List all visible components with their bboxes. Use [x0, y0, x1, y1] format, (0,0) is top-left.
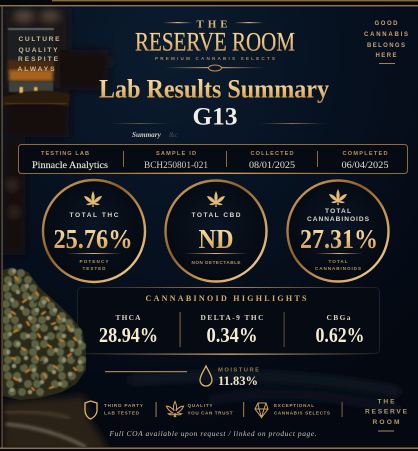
logo: PREMIUM CANNABIS SELECTS — [155, 56, 275, 61]
stat: total thc: POTENCY — [80, 259, 108, 264]
thca: 28.94% — [99, 323, 158, 347]
tagline left: ALWAYS — [18, 66, 55, 73]
cannabis bud — [3, 268, 86, 400]
completed: COMPLETED — [342, 151, 388, 157]
stat: total cannabinoids — [288, 180, 388, 282]
tagline right: BELONGS — [367, 43, 405, 49]
stat: total cannabinoids: TOTAL — [328, 259, 348, 264]
icon: leaf — [166, 401, 184, 417]
footnote: Full COA available upon request / linked on product page. — [108, 429, 317, 438]
moisture: MOISTURE — [218, 368, 259, 374]
cbga — [316, 313, 364, 347]
stat: total cannabinoids: 27.31% — [300, 224, 378, 254]
thca: THCA — [116, 313, 141, 322]
product name: G13 — [192, 104, 238, 130]
stat: total thc — [43, 180, 145, 282]
icon: diamond — [255, 403, 268, 418]
sample id: BCH250801-021 — [144, 160, 208, 170]
footer logo: RESERVE — [365, 408, 408, 416]
footer logo — [365, 398, 408, 432]
collected: 08/01/2025 — [249, 160, 295, 171]
stat: total cbd: ND — [198, 224, 234, 254]
tagline left: RESPITE — [18, 56, 59, 63]
moisture: 11.83% — [218, 373, 258, 388]
cbga: 0.62% — [316, 323, 364, 347]
stat: total cbd: NON DETECTABLE — [192, 260, 240, 265]
tagline right: CANNABIS — [364, 32, 408, 38]
title: Lab Results Summary — [99, 74, 329, 104]
logo — [135, 18, 295, 71]
badges: YOU CAN TRUST — [188, 410, 233, 416]
tagline left: CULTURE — [18, 36, 60, 43]
testing lab — [32, 151, 108, 171]
table reflection — [3, 376, 400, 451]
stat: total cannabinoids: CANNABINOIDS — [307, 216, 370, 223]
logo: RESERVE ROOM — [135, 28, 295, 56]
collected: COLLECTED — [250, 151, 294, 157]
tagline right: GOOD — [374, 21, 398, 27]
badges: EXCEPTIONAL — [274, 403, 314, 408]
logo: THE — [196, 18, 232, 30]
stat: total cbd — [166, 180, 266, 282]
badges: THIRD PARTY — [104, 403, 143, 408]
stat: total thc: 25.76% — [54, 224, 132, 254]
icon: shield — [85, 401, 97, 419]
badges — [85, 401, 343, 419]
sample id: SAMPLE ID — [156, 151, 196, 157]
footer logo: THE — [378, 398, 395, 406]
badges: CANNABIS SELECTS — [274, 410, 330, 416]
tagline left — [18, 36, 60, 73]
completed: 06/04/2025 — [342, 160, 389, 171]
thca — [99, 313, 158, 347]
stat: total thc: TOTAL THC — [70, 212, 119, 219]
subtitle fragment: &c — [169, 131, 178, 139]
whiskey glass scene — [3, 8, 112, 255]
subtitle fragment — [110, 123, 325, 139]
completed — [342, 151, 389, 171]
stat: total cannabinoids: CANNABINOIDS — [315, 266, 361, 271]
delta-9 thc — [200, 313, 264, 347]
stat: total cannabinoids: TOTAL — [325, 208, 351, 215]
moisture — [105, 366, 259, 388]
testing lab: TESTING LAB — [41, 151, 89, 157]
sample id — [144, 151, 208, 170]
tagline right — [364, 21, 408, 64]
stat: total thc: TESTED — [82, 266, 106, 271]
stat: total cbd: TOTAL CBD — [192, 212, 241, 219]
delta-9 thc: DELTA-9 THC — [200, 313, 264, 322]
subtitle fragment: Summary — [132, 131, 162, 139]
testing lab: Pinnacle Analytics — [32, 160, 108, 171]
tagline left: QUALITY — [18, 47, 58, 54]
icon: water drop — [200, 366, 212, 386]
heading: CANNABINOID HIGHLIGHTS — [146, 294, 307, 303]
badges: QUALITY — [188, 403, 212, 408]
panel: cannabinoid highlights — [78, 287, 380, 355]
delta-9 thc: 0.34% — [206, 323, 258, 347]
cbga: CBGa — [326, 313, 351, 322]
collected — [249, 151, 295, 171]
panel: sample info — [18, 144, 408, 174]
footer logo: ROOM — [372, 419, 400, 426]
badges: LAB TESTED — [104, 410, 140, 416]
tagline right: HERE — [376, 53, 396, 59]
